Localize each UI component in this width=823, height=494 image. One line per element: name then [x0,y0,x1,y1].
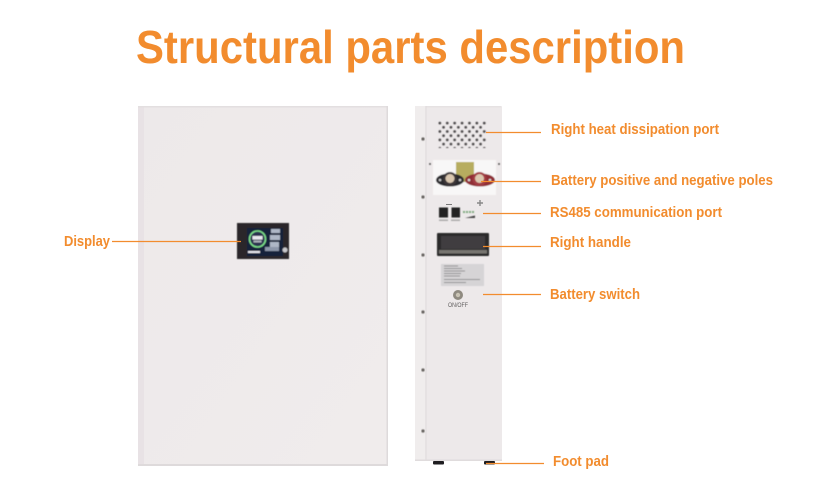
callout: battery poles: Battery positive and negative poles [551,172,773,189]
callout: foot pad: Foot pad [553,453,609,470]
icon: negative terminal [436,172,464,186]
screws on side edge [421,137,425,433]
panel: battery front view [138,106,388,466]
icon: battery poles recess [429,160,500,195]
icon: right handle [437,233,489,256]
icon: heat dissipation vents [438,121,486,148]
minus sign [446,204,452,205]
callout: right handle: Right handle [550,234,631,251]
icon: battery switch [448,290,468,309]
panel: battery side view [415,106,502,464]
icon: foot pads [433,461,495,464]
title: Structural parts description [136,21,685,73]
callout: right heat dissipation port: Right heat dissipation port [551,121,719,138]
icon: product label [441,264,484,286]
plus sign [477,200,483,206]
callout: RS485 port: RS485 communication port [550,204,722,221]
icon: positive terminal [465,172,495,186]
callout: display: Display [64,233,111,250]
callout: foot pad [486,453,609,470]
icon: display screen [237,223,289,259]
icon: battery switch: ON/OFF [448,302,468,309]
callout: battery switch: Battery switch [550,286,640,303]
icon: RS485 ports [439,208,475,221]
